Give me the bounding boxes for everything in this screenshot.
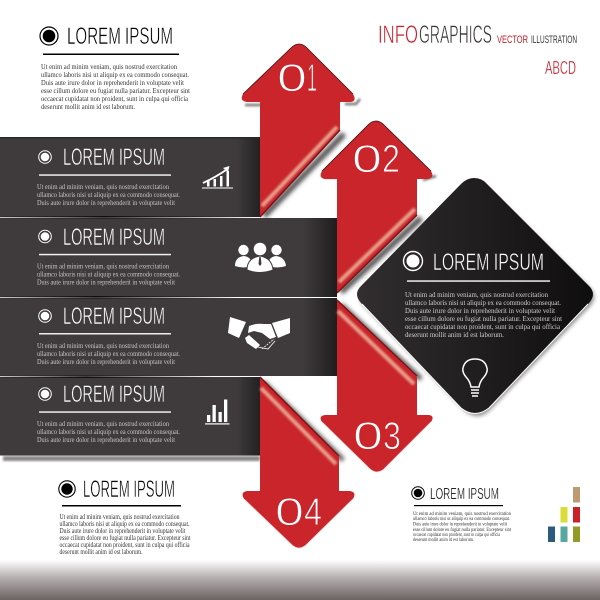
fold shadow 1	[264, 134, 344, 216]
body text: esse cillum dolore eu fugiat nulla pariatur. Excepteur sint	[405, 314, 563, 323]
fold shadow 4	[263, 382, 343, 460]
band 4	[0, 376, 260, 461]
number 03: 03	[353, 415, 401, 458]
colour swatches	[548, 487, 580, 542]
body text: occaecat cupidatat non proident, sunt in culpa qui officia	[413, 531, 500, 538]
body text: Ut enim ad minim veniam, quis nostrud exercitation	[37, 341, 169, 350]
body text: occaecat cupidatat non proident, sunt in culpa qui officia	[41, 94, 188, 103]
arrow 01	[242, 44, 355, 217]
body text: Duis aute irure dolor in reprehenderit in voluptate velit	[413, 522, 507, 528]
body text: Duis aute irure dolor in reprehenderit in voluptate velit	[60, 527, 186, 535]
body text: ullamco laboris nisi ut aliquip ex ea commodo consequat.	[37, 270, 180, 278]
icon: people	[235, 242, 286, 272]
body text: Ut enim ad minim veniam, quis nostrud exercitation	[60, 513, 180, 521]
body text: ullamco laboris nisi ut aliquip ex ea commodo consequat.	[60, 520, 190, 528]
icon: bar chart	[205, 400, 230, 424]
body text	[37, 419, 180, 444]
icon: growth chart	[202, 166, 233, 188]
body text: Duis aute irure dolor in reprehenderit in voluptate velit	[405, 306, 556, 315]
fold highlight	[261, 388, 336, 464]
panel: bottom right text	[412, 486, 511, 543]
number 01: 01	[277, 57, 317, 100]
body text: Ut enim ad minim veniam, quis nostrud exercitation	[413, 511, 511, 517]
body text: occaecat cupidatat non proident, sunt in culpa qui officia	[60, 541, 190, 549]
body text: ullamco laboris nisi ut aliquip ex ea commodo consequat.	[37, 427, 180, 436]
body text: occaecat cupidatat non proident, sunt in culpa qui officia	[405, 322, 561, 331]
number 04: 04	[275, 491, 322, 534]
heading: LOREM IPSUM	[430, 486, 499, 503]
heading: LOREM IPSUM	[63, 224, 165, 251]
bullet	[39, 230, 51, 243]
title: GRAPHICS	[419, 21, 492, 49]
panel: diamond	[357, 178, 593, 414]
floor gradient	[0, 560, 600, 600]
icon: handshake	[228, 317, 290, 349]
body text: deserunt mollit anim id est laborum.	[413, 537, 474, 543]
body text: Ut enim ad minim veniam, quis nostrud exercitation	[37, 182, 169, 191]
body text: deserunt mollit anim id est laborum.	[41, 102, 135, 111]
diamond shadow	[360, 182, 594, 416]
body text: Ut enim ad minim veniam, quis nostrud exercitation	[37, 262, 169, 270]
title: VECTOR	[497, 34, 528, 46]
fold highlight	[262, 127, 337, 206]
band 3	[0, 296, 337, 376]
fold highlight	[339, 209, 415, 282]
bullet	[39, 151, 51, 163]
body text: ullamco laboris nisi ut aliquip ex ea commodo consequat.	[413, 516, 510, 522]
arrow 03	[321, 300, 433, 472]
icon: light bulb	[463, 359, 487, 396]
body text: ullamco laboris nisi ut aliquip ex ea commodo consequat.	[37, 349, 180, 358]
body text: Duis aute irure dolor in reprehenderit in voluptate velit	[37, 435, 176, 444]
body text: deserunt mollit anim id est laborum.	[60, 548, 143, 556]
heading: LOREM IPSUM	[63, 303, 165, 330]
body text: Ut enim ad minim veniam, quis nostrud exercitation	[405, 290, 548, 299]
body text	[37, 262, 180, 286]
body text: Ut enim ad minim veniam, quis nostrud exercitation	[41, 62, 177, 71]
bullet	[39, 388, 51, 400]
body text: ullamco laboris nisi ut aliquip ex ea commodo consequat.	[405, 298, 561, 307]
body text: Duis aute irure dolor in reprehenderit in voluptate velit	[41, 78, 185, 87]
title: ABCD	[545, 58, 576, 78]
bullet	[39, 310, 51, 322]
body text: Duis aute irure dolor in reprehenderit in voluptate velit	[37, 278, 176, 286]
bullet	[412, 487, 424, 499]
fold highlight	[338, 311, 414, 384]
body text	[37, 341, 180, 366]
body text: ullamco laboris nisi ut aliquip ex ea commodo consequat.	[41, 70, 189, 79]
fold shadow 3	[341, 305, 421, 379]
heading: LOREM IPSUM	[83, 476, 175, 503]
body text: esse cillum dolore eu fugiat nulla pariatur. Excepteur sint	[60, 534, 191, 542]
body text: deserunt mollit anim id est laborum.	[405, 330, 504, 339]
heading: LOREM IPSUM	[63, 144, 165, 171]
body text: ullamco laboris nisi ut aliquip ex ea commodo consequat.	[37, 190, 180, 199]
body text	[37, 182, 180, 207]
fold shadow 2	[341, 218, 421, 292]
title: INFO	[378, 21, 418, 49]
heading: LOREM IPSUM	[433, 249, 544, 276]
body text	[60, 513, 191, 556]
arrow 02	[321, 121, 432, 293]
heading: LOREM IPSUM	[63, 381, 165, 408]
body text	[41, 62, 191, 111]
body text	[413, 511, 511, 543]
bullet	[404, 252, 422, 270]
band 1	[0, 137, 260, 217]
arrow 04	[243, 377, 354, 548]
body text: Duis aute irure dolor in reprehenderit in voluptate velit	[37, 357, 176, 366]
title	[378, 21, 577, 78]
heading: LOREM IPSUM	[67, 23, 173, 50]
band 2	[0, 216, 337, 297]
arrow shadows	[245, 99, 436, 180]
body text: Ut enim ad minim veniam, quis nostrud exercitation	[37, 419, 169, 428]
number 02: 02	[352, 138, 400, 181]
body text: esse cillum dolore eu fugiat nulla pariatur. Excepteur sint	[413, 526, 511, 533]
panel: bottom left text	[59, 476, 191, 556]
body text	[405, 290, 563, 339]
body text: Duis aute irure dolor in reprehenderit in voluptate velit	[37, 198, 176, 207]
body text: esse cillum dolore eu fugiat nulla pariatur. Excepteur sint	[41, 86, 191, 95]
panel: top left text	[40, 23, 191, 111]
bullet	[59, 481, 75, 497]
bullet	[40, 27, 58, 45]
